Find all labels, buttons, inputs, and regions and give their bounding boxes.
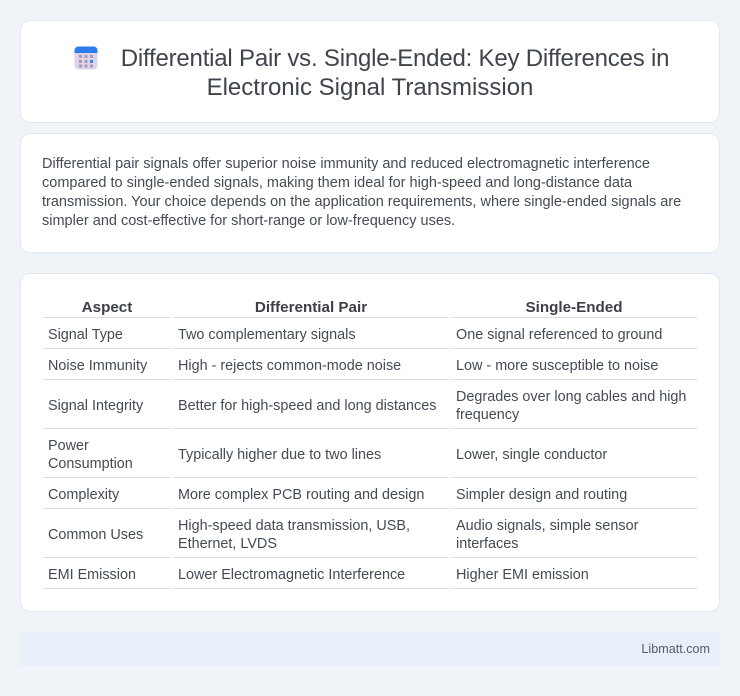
row: signal integrity: Better for high-speed and long distances — [178, 398, 436, 414]
header row: Aspect — [82, 299, 132, 316]
title: Differential Pair vs. Single-Ended: Key Differences in — [121, 45, 669, 72]
row: emi emission: EMI Emission — [48, 567, 136, 583]
row: power consumption: Lower, single conductor — [456, 447, 607, 463]
title card — [20, 20, 720, 123]
row: power consumption: Power — [48, 438, 89, 454]
row: noise immunity — [48, 358, 658, 374]
row: power consumption — [48, 438, 607, 472]
footer bar — [20, 632, 720, 666]
intro paragraph — [42, 156, 681, 229]
row: common uses: High-speed data transmission, USB, — [178, 518, 410, 534]
row: common uses — [48, 518, 638, 552]
header row — [82, 299, 623, 316]
row: emi emission: Lower Electromagnetic Interference — [178, 567, 405, 583]
row: emi emission — [48, 567, 589, 583]
row: signal integrity: frequency — [456, 407, 519, 423]
row: noise immunity: High - rejects common-mode noise — [178, 358, 401, 374]
row: signal type — [48, 327, 662, 343]
footer credit: Libmatt.com — [641, 642, 710, 656]
comparison table panel — [20, 273, 720, 612]
row: common uses: Ethernet, LVDS — [178, 536, 277, 552]
row: power consumption: Consumption — [48, 456, 133, 472]
comparison table — [43, 299, 697, 589]
icon: calendar — [74, 46, 98, 70]
intro paragraph: compared to single-ended signals, making them ideal for high-speed and long-distance data — [42, 175, 632, 191]
row: complexity: Complexity — [48, 487, 119, 503]
row: noise immunity: Low - more susceptible to noise — [456, 358, 658, 374]
row: common uses: Common Uses — [48, 527, 143, 543]
intro paragraph: simpler and cost-effective for short-range or low-frequency uses. — [42, 213, 455, 229]
row: signal integrity: Degrades over long cables and high — [456, 389, 686, 405]
row: complexity: Simpler design and routing — [456, 487, 627, 503]
title — [121, 45, 669, 101]
row: common uses: Audio signals, simple sensor — [456, 518, 638, 534]
intro paragraph: Differential pair signals offer superior noise immunity and reduced electromagnetic interference — [42, 156, 650, 172]
row: complexity: More complex PCB routing and design — [178, 487, 424, 503]
header row: Differential Pair — [255, 299, 367, 316]
intro paragraph: transmission. Your choice depends on the application requirements, where single-ended signals are — [42, 194, 681, 210]
intro text panel — [20, 133, 720, 253]
row: noise immunity: Noise Immunity — [48, 358, 147, 374]
row: power consumption: Typically higher due to two lines — [178, 447, 381, 463]
row: signal integrity: Signal Integrity — [48, 398, 143, 414]
row: common uses: interfaces — [456, 536, 518, 552]
row: emi emission: Higher EMI emission — [456, 567, 589, 583]
title: Electronic Signal Transmission — [207, 74, 533, 101]
row: signal integrity — [48, 389, 686, 423]
row: signal type: One signal referenced to ground — [456, 327, 662, 343]
header row: Single-Ended — [525, 299, 623, 316]
row: complexity — [48, 487, 627, 503]
row: signal type: Two complementary signals — [178, 327, 356, 343]
row: signal type: Signal Type — [48, 327, 123, 343]
